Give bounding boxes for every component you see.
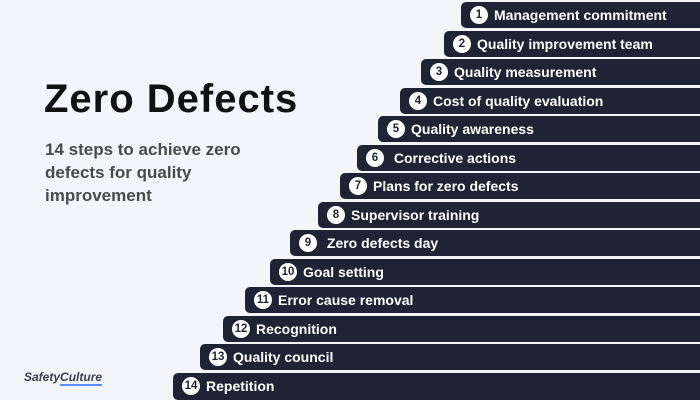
step 10: [270, 258, 700, 284]
step 1: Management commitment: [494, 7, 667, 23]
step 1: 1: [476, 9, 482, 21]
step 9: Zero defects day: [327, 235, 438, 251]
step 7: 7: [355, 180, 361, 192]
step 4: 4: [415, 94, 421, 106]
title: Zero Defects: [44, 77, 298, 121]
step 6: 6: [372, 152, 378, 164]
step 3: Quality measurement: [454, 64, 596, 80]
step 7: Plans for zero defects: [373, 178, 518, 194]
step 9: 9: [305, 237, 311, 249]
step 8: 8: [333, 208, 339, 220]
step 14: 14: [185, 380, 197, 392]
step 13: [200, 344, 700, 370]
step 5: 5: [393, 123, 399, 135]
step 6: Corrective actions: [394, 150, 516, 166]
step 2: 2: [459, 38, 465, 50]
step 11: Error cause removal: [278, 292, 413, 308]
step 8: Supervisor training: [351, 206, 479, 222]
step 13: 13: [212, 351, 224, 363]
step 12: [223, 316, 700, 342]
step 4: [400, 88, 700, 114]
step 1: [461, 2, 700, 28]
step 12: Recognition: [256, 320, 337, 336]
step 6: [357, 144, 700, 170]
step 3: 3: [436, 66, 442, 78]
step 10: Goal setting: [303, 264, 384, 280]
step 11: 11: [257, 294, 269, 306]
step 5: [378, 116, 700, 142]
staircase of steps: [173, 2, 700, 400]
step 2: Quality improvement team: [477, 36, 653, 52]
step 2: [444, 30, 700, 56]
step 7: [340, 173, 700, 199]
logo: SafetyCulture: SafetyCulture: [24, 370, 102, 384]
step 10: 10: [282, 266, 294, 278]
step 5: Quality awareness: [411, 121, 534, 137]
step 4: Cost of quality evaluation: [433, 92, 603, 108]
step 11: [245, 287, 700, 313]
step 14: [173, 372, 700, 400]
step 14: Repetition: [206, 378, 274, 394]
step 3: [421, 59, 700, 85]
step 8: [318, 202, 700, 228]
step 12: 12: [235, 322, 247, 334]
step 13: Quality council: [233, 349, 333, 365]
subtitle: 14 steps to achieve zero defects for quality improvement: [45, 140, 241, 205]
step 9: [290, 230, 700, 256]
